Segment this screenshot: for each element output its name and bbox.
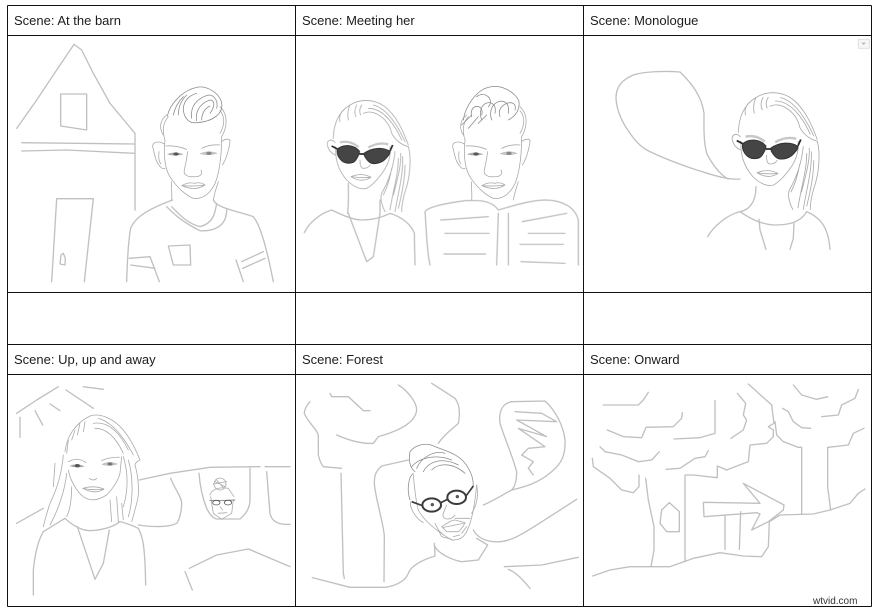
panel: sketch meeting her bbox=[304, 86, 578, 265]
panel: sketch onward bbox=[592, 384, 865, 576]
heading: Monologue: Scene: Monologue bbox=[590, 13, 698, 28]
panel: sketch forest bbox=[304, 383, 578, 588]
woman with sunglasses bbox=[708, 93, 830, 249]
panel: sketch at the barn bbox=[17, 44, 273, 282]
heading: Meeting her: Scene: Meeting her bbox=[302, 13, 415, 28]
speech bubble bbox=[616, 71, 740, 179]
menu toggle bbox=[858, 39, 869, 48]
panel: sketch up, up and away bbox=[17, 387, 290, 595]
arrow sign bbox=[703, 483, 784, 549]
heading: Forest: Scene: Forest bbox=[302, 352, 383, 367]
heading: Up, up and away: Scene: Up, up and away bbox=[14, 352, 156, 367]
heading: Onward: Scene: Onward bbox=[590, 352, 680, 367]
watermark: wtvid.com bbox=[812, 596, 857, 607]
panel: sketch monologue bbox=[616, 39, 869, 249]
speech bubble with scribble bbox=[483, 401, 565, 505]
woman face and hair bbox=[43, 415, 140, 527]
small man in window bbox=[209, 478, 235, 519]
man with glasses bbox=[408, 444, 477, 540]
heading: At the barn: Scene: At the barn bbox=[14, 13, 121, 28]
